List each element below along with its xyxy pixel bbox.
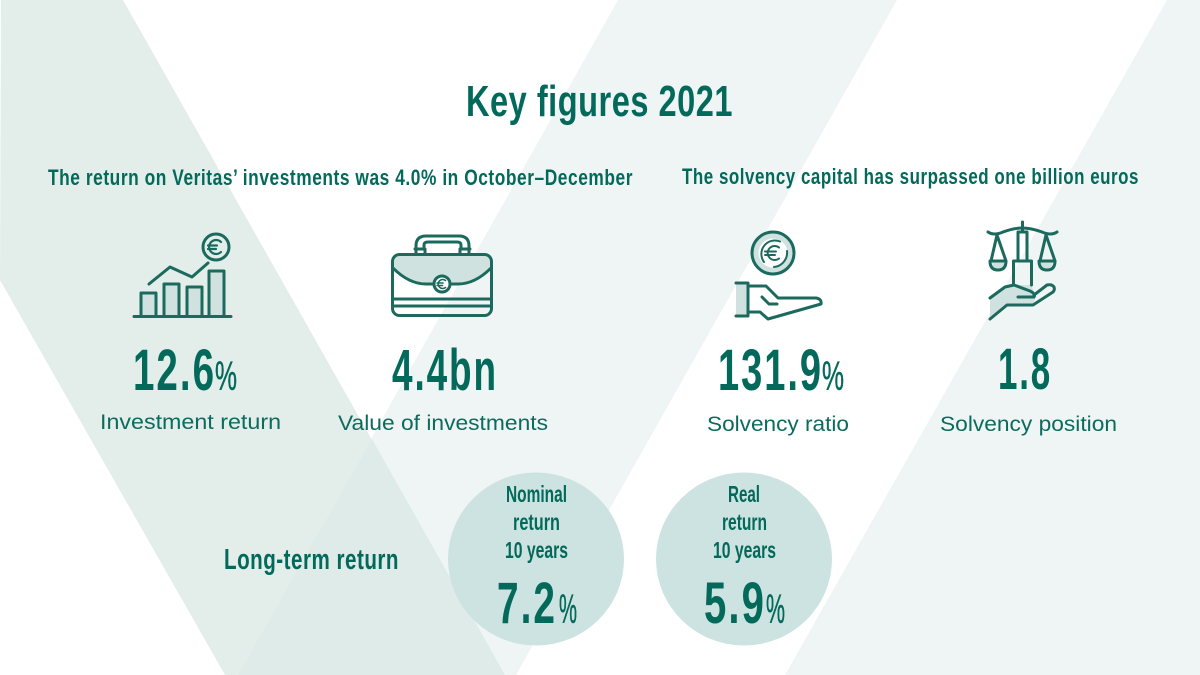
circle: real return: 5.9	[704, 571, 766, 636]
figure: solvency ratio: %	[822, 353, 844, 399]
heading: investments: The return on Veritas’ investments was 4.0% in October–December	[48, 165, 633, 190]
figure: solvency ratio: 131.9	[718, 338, 823, 403]
circle: real return: %	[766, 586, 785, 632]
label: solvency ratio: Solvency ratio	[707, 413, 849, 436]
circle: nominal return: return	[513, 509, 560, 535]
figure: value of investments: 4.4bn	[392, 338, 498, 403]
heading: long-term return: Long-term return	[224, 544, 399, 576]
circle: real return: 10 years	[713, 537, 776, 563]
icon: bar chart with euro coin	[134, 234, 231, 316]
circle: nominal return: 7.2	[497, 571, 557, 636]
figure: investment return: %	[215, 353, 237, 399]
circle: real return: return	[722, 509, 767, 535]
label: investment return: Investment return	[100, 411, 281, 434]
circle: nominal return: Nominal	[506, 481, 567, 507]
circle: nominal return: %	[559, 586, 577, 632]
circle: nominal return: 10 years	[505, 537, 568, 563]
icon: briefcase	[392, 236, 492, 316]
figure: solvency position: 1.8	[998, 337, 1052, 402]
icon: scales on a hand	[988, 222, 1057, 319]
title: Key figures 2021	[466, 77, 733, 126]
circle: nominal return	[448, 472, 624, 646]
circle: real return: Real	[728, 481, 760, 507]
label: solvency position: Solvency position	[940, 413, 1117, 436]
circle: real return	[656, 472, 832, 646]
icon: hand with euro coin	[736, 232, 821, 319]
figure: investment return: 12.6	[133, 338, 216, 403]
label: value of investments: Value of investments	[338, 412, 548, 435]
